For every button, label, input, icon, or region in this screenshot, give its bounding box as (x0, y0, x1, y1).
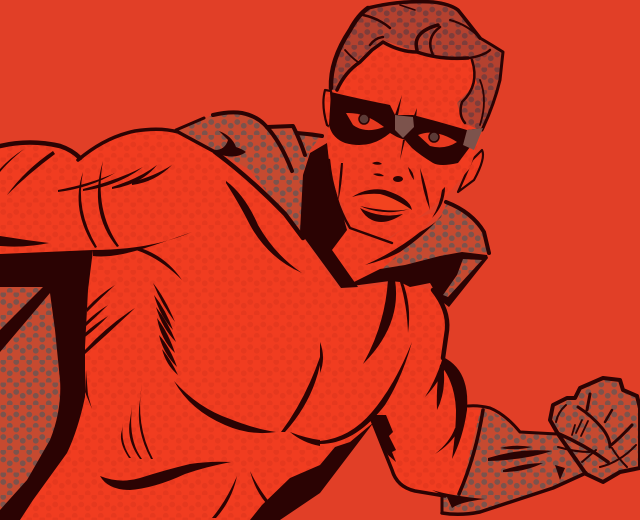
right eye (418, 133, 457, 147)
ear left (323, 90, 334, 130)
collar lower patch (443, 259, 482, 297)
ear right (458, 150, 483, 192)
torso and arms (0, 130, 482, 520)
bottom-left cape scrap (22, 506, 74, 520)
mouth (352, 189, 412, 222)
clenched fist (550, 378, 640, 482)
mask nose piece (395, 115, 414, 138)
left eye (346, 113, 384, 130)
mask (329, 92, 483, 165)
right iris (429, 132, 439, 142)
black cape shadow (0, 250, 93, 520)
hair (330, 2, 503, 132)
sleeve underside hatch (372, 415, 396, 462)
back cape: top of shoulder (176, 113, 322, 240)
hair strands (331, 2, 503, 130)
spike on shadow (85, 370, 92, 409)
black lower torso shadow (250, 422, 374, 520)
face (327, 46, 490, 240)
mask tie (463, 128, 483, 150)
collar outline (446, 202, 489, 253)
back cape: left panel (0, 284, 60, 520)
right forearm glove (441, 408, 586, 514)
neck (332, 210, 440, 287)
left iris (359, 114, 369, 124)
facial lines (338, 95, 445, 265)
jaw outline (329, 160, 392, 243)
cape fold lines (176, 112, 322, 171)
tapered muscle lines (0, 131, 485, 518)
black collar shadow (300, 143, 358, 288)
body contour lines (0, 129, 586, 514)
fist finger lines (556, 394, 636, 467)
right collar (381, 203, 489, 270)
forearm creases (488, 446, 565, 480)
collar black underside (344, 252, 488, 307)
